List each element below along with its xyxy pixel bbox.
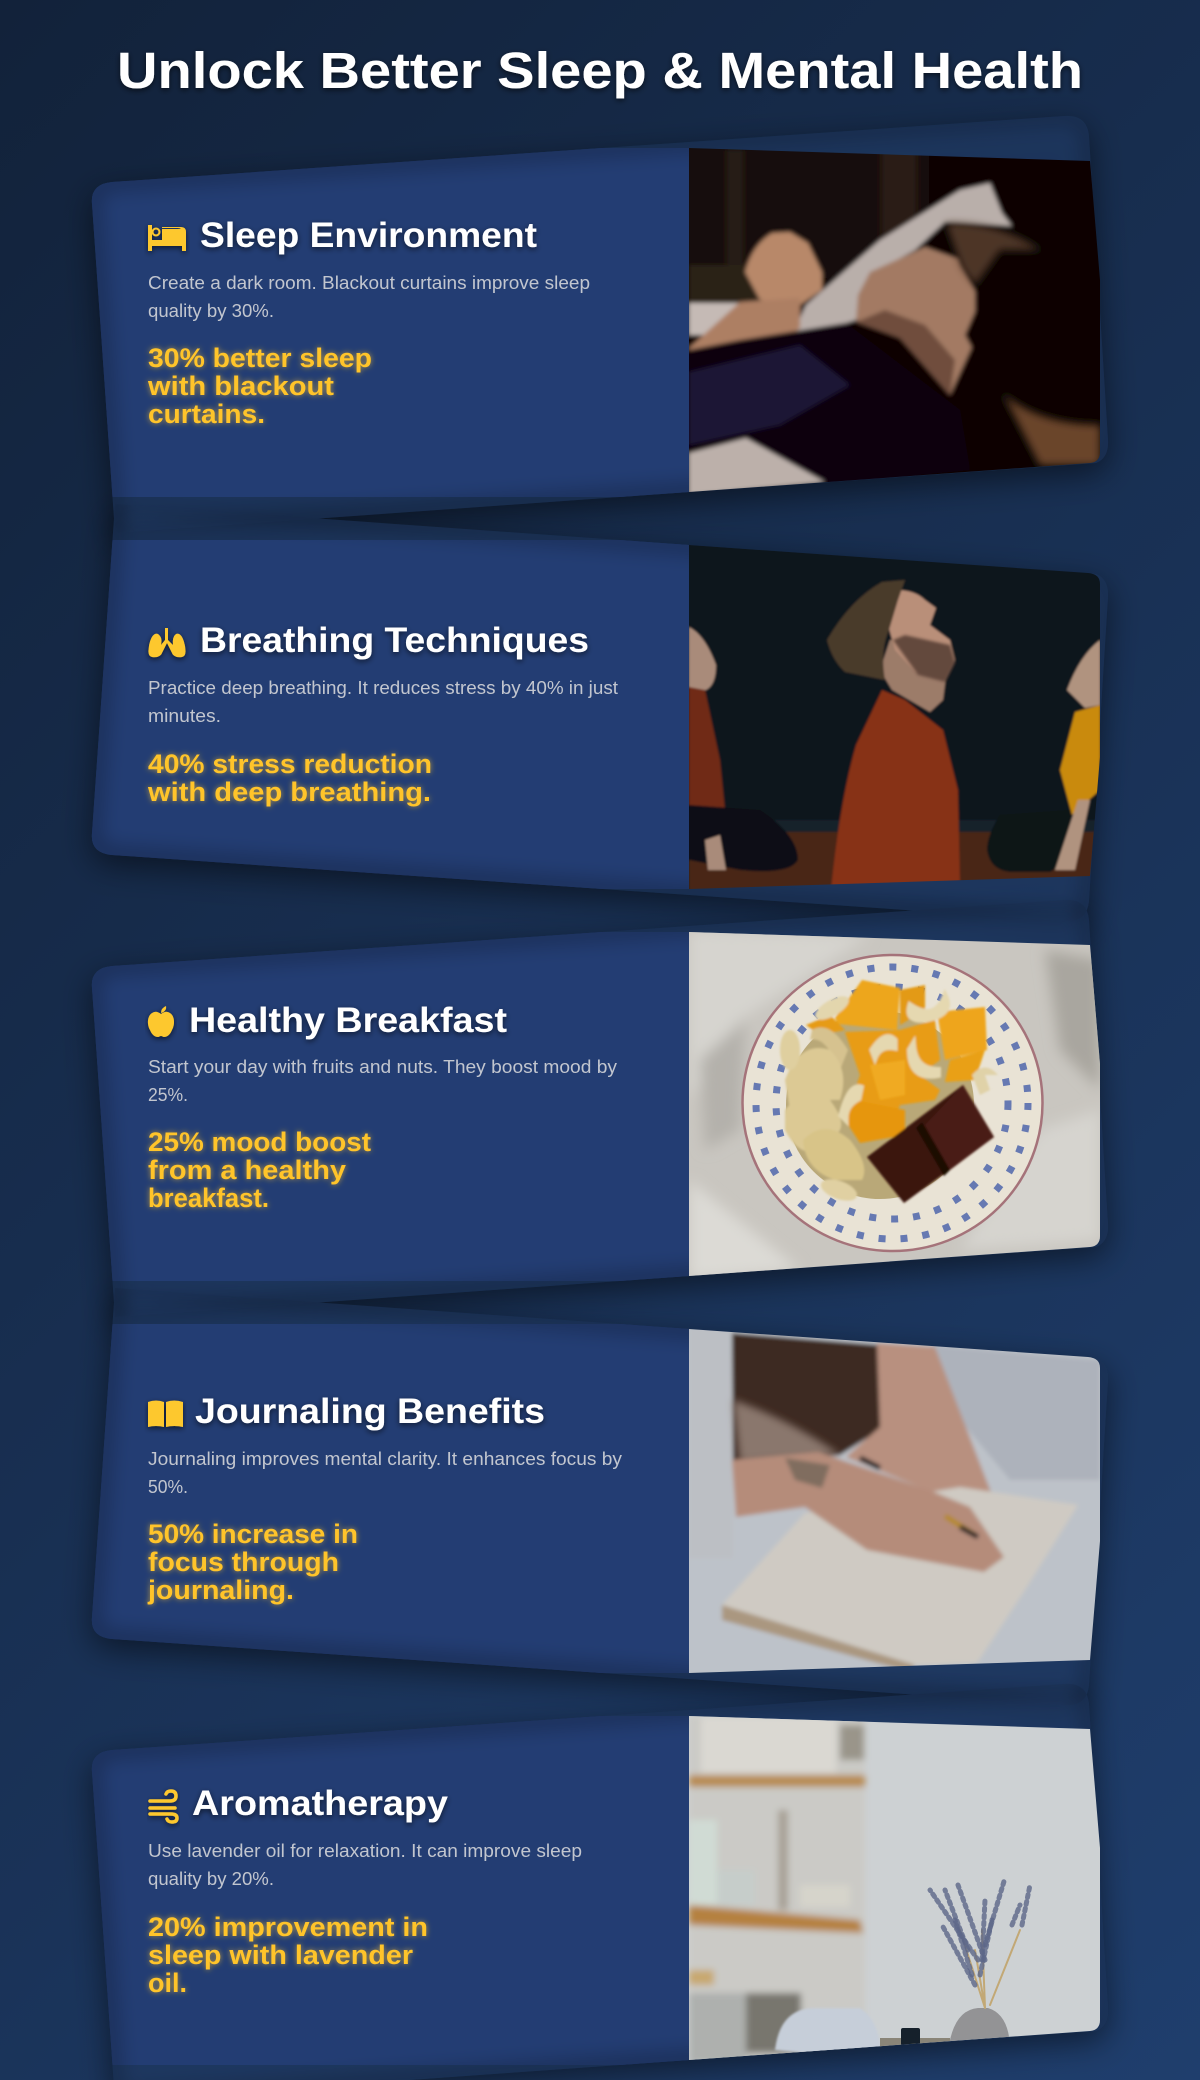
title: Unlock Better Sleep & Mental Health [117,42,1083,99]
key statistic: 50% increase in [148,1519,358,1549]
key statistic: with deep breathing. [147,777,431,807]
heading: Sleep Environment [200,216,537,255]
body text: quality by 20%. [148,1869,274,1889]
panel: breathing techniques [80,504,1110,921]
body text [148,1841,582,1889]
key statistic: 25% mood boost [148,1127,371,1157]
key statistic: 30% better sleep [148,343,372,373]
card back shadows and slanted sheets [92,116,1108,2080]
key statistic: sleep with lavender [148,1940,414,1970]
key statistic: journaling. [147,1575,294,1605]
body text: minutes. [148,706,221,726]
key statistic: oil. [148,1968,187,1998]
icon: wind [150,1791,177,1822]
key statistic [147,343,372,429]
heading: Aromatherapy [192,1784,449,1823]
icon: lungs [148,628,186,657]
key statistic: from a healthy [148,1155,346,1185]
body text: Use lavender oil for relaxation. It can improve sleep [148,1841,582,1861]
key statistic: 20% improvement in [148,1912,428,1942]
key statistic: curtains. [148,399,265,429]
panel: sleep environment [80,116,1110,533]
body text: Journaling improves mental clarity. It enhances focus by [148,1449,622,1469]
panel: journaling benefits [80,1288,1110,1705]
photo: breakfast bowl [680,925,1110,1285]
key statistic: 40% stress reduction [148,749,432,779]
panel: aromatherapy [80,1684,1110,2080]
key statistic: breakfast. [148,1183,269,1213]
key statistic: with blackout [147,371,334,401]
body text: quality by 30%. [148,301,274,321]
body text: Create a dark room. Blackout curtains improve sleep [148,273,590,293]
panel background [80,1288,1108,1705]
body text: Practice deep breathing. It reduces stress by 40% in just [148,678,618,698]
heading: Journaling Benefits [195,1392,545,1431]
key statistic [148,1127,371,1213]
photo: woman sleeping [680,140,1110,500]
body text: Start your day with fruits and nuts. They boost mood by [148,1057,617,1077]
key statistic: focus through [148,1547,339,1577]
heading: Breathing Techniques [200,621,589,660]
icon: bed [148,225,186,251]
body text [148,1449,622,1497]
key statistic [147,749,432,807]
photo: lavender vase [680,1710,1110,2070]
panel background [80,900,1108,1317]
body text: 50%. [148,1477,188,1497]
key statistic [147,1519,358,1605]
panel background [80,1684,1108,2080]
panel background [80,116,1108,533]
panel background [80,504,1108,921]
icon: apple [148,1006,174,1037]
body text [148,1057,617,1105]
body text: 25%. [148,1085,188,1105]
heading: Healthy Breakfast [189,1001,507,1040]
key statistic [148,1912,428,1998]
panel: healthy breakfast [80,900,1110,1317]
body text [148,273,590,321]
body text [148,678,618,726]
photo: man breathing [680,540,1110,900]
photo: journaling on bed [680,1325,1110,1685]
icon: open book [148,1400,183,1427]
